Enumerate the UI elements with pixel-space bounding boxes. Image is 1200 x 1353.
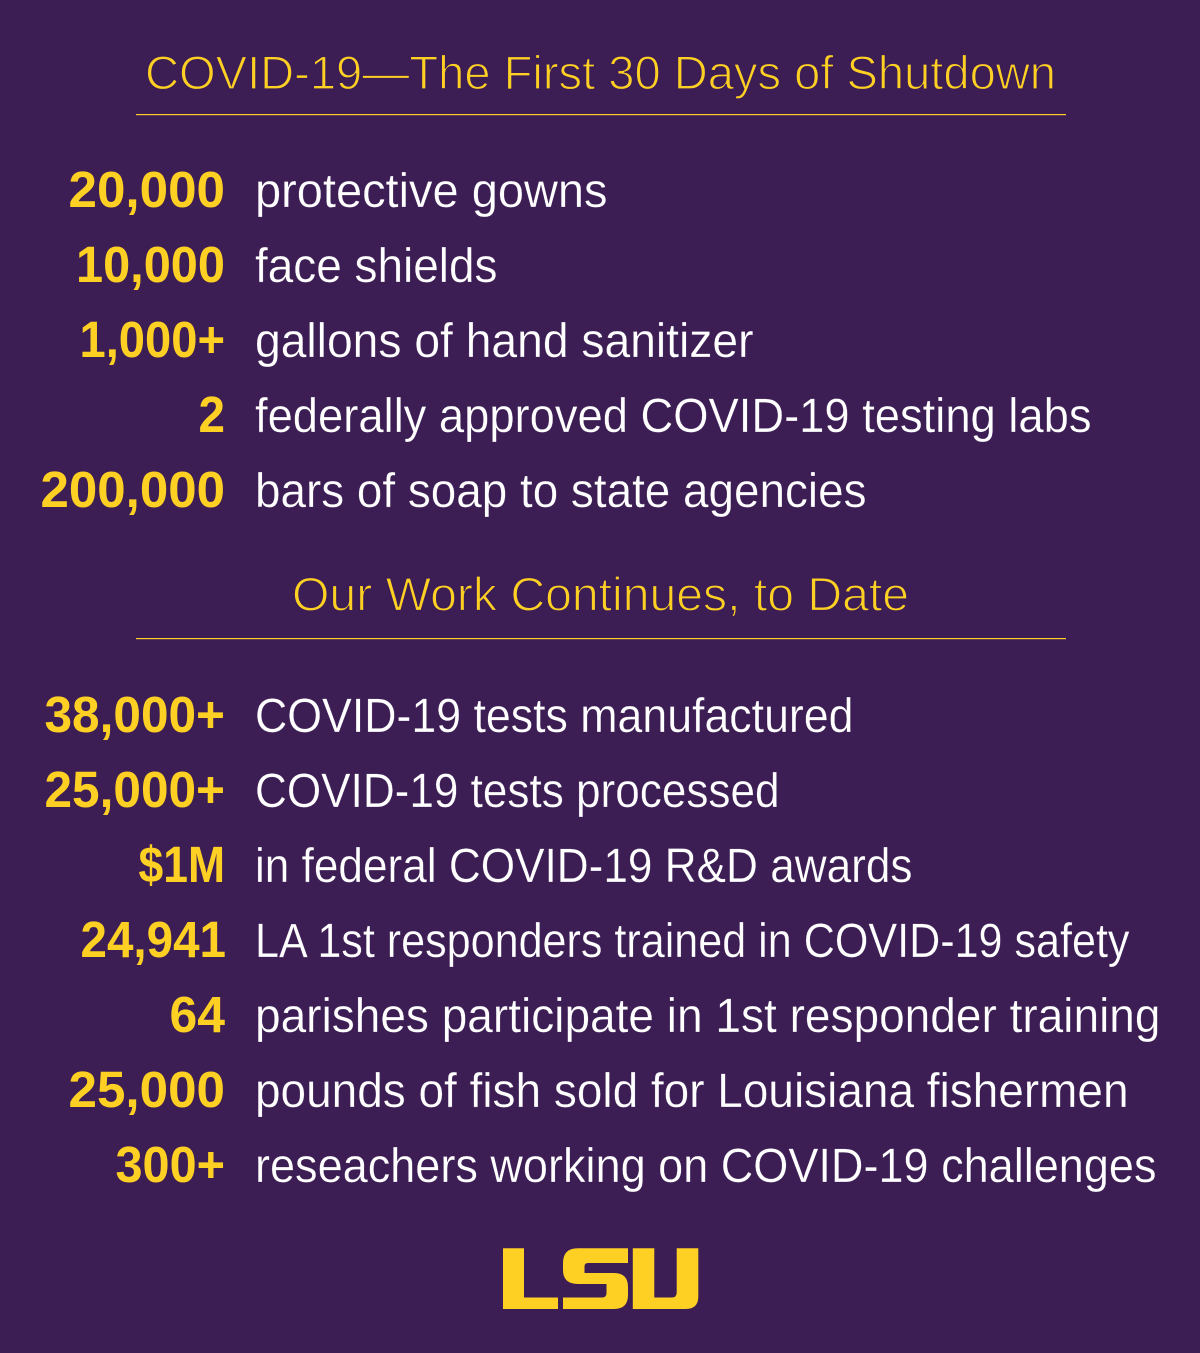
stat: tests processed: 25,000+: [44, 761, 225, 818]
stat: tests manufactured: [44, 686, 854, 743]
stat: researchers: reseachers working on COVID-19 challenges: [255, 1139, 1156, 1193]
stat: pounds of fish: pounds of fish sold for Louisiana fishermen: [255, 1064, 1128, 1118]
stat: tests processed: [44, 761, 780, 818]
stat: testing labs: 2: [198, 386, 225, 443]
stat: hand sanitizer: gallons of hand sanitizer: [255, 314, 754, 368]
icon: LSU logo: [503, 1248, 698, 1309]
stat: bars of soap: bars of soap to state agencies: [255, 464, 866, 518]
stat: hand sanitizer: 1,000+: [80, 311, 225, 368]
stat: protective gowns: [68, 161, 608, 218]
stat: testing labs: federally approved COVID-19 testing labs: [255, 389, 1092, 443]
stat: protective gowns: 20,000: [68, 161, 225, 218]
stat: face shields: 10,000: [76, 236, 225, 293]
stat: responders trained: 24,941: [80, 911, 226, 968]
stat: federal awards: in federal COVID-19 R&D awards: [255, 839, 912, 893]
stat: researchers: 300+: [116, 1136, 225, 1193]
stat: protective gowns: protective gowns: [255, 164, 608, 218]
heading: first 30 days: COVID-19—The First 30 Days of Shutdown: [145, 46, 1056, 99]
heading: work continues: Our Work Continues, to Date: [292, 568, 909, 620]
stat: bars of soap: 200,000: [40, 461, 225, 518]
stat: tests manufactured: COVID-19 tests manufactured: [255, 689, 854, 743]
panel: first 30 days stats: [40, 161, 1092, 518]
stat: tests manufactured: 38,000+: [44, 686, 225, 743]
stat: tests processed: COVID-19 tests processed: [255, 764, 780, 818]
stat: face shields: face shields: [255, 239, 498, 293]
stat: parishes: parishes participate in 1st responder training: [255, 989, 1160, 1043]
stat: bars of soap: [40, 461, 866, 518]
stat: face shields: [76, 236, 498, 293]
stat: hand sanitizer: [80, 311, 754, 368]
panel: work to date stats: [44, 686, 1160, 1193]
stat: parishes: 64: [170, 986, 226, 1043]
stat: federal awards: $1M: [138, 836, 225, 893]
stat: pounds of fish: 25,000: [68, 1061, 225, 1118]
